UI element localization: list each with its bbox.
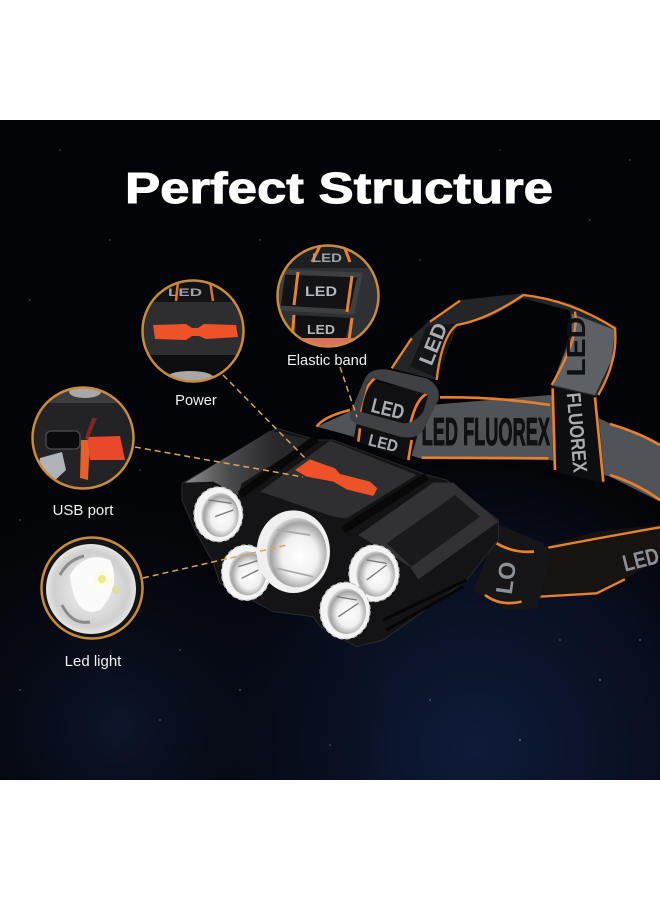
front buckle and band: LED (369, 394, 407, 425)
center top panel (260, 441, 417, 518)
callout: elastic band (278, 240, 378, 348)
left top panel (185, 431, 312, 495)
arrow: USB port leader (135, 447, 303, 477)
housing (182, 428, 498, 647)
callout: LED light (42, 538, 142, 638)
upper arc strap: LED (415, 320, 453, 369)
title: Perfect Structure (125, 164, 553, 213)
arrow: elastic band leader (340, 367, 357, 417)
lens: bottom (320, 582, 370, 639)
lens: lower left (222, 545, 270, 600)
callout: power: LED (168, 287, 202, 299)
background: night sky (0, 120, 660, 780)
front buckle and band (350, 369, 439, 462)
vents (383, 580, 467, 630)
arrow: power leader (223, 375, 307, 460)
callout: power (140, 280, 250, 385)
side lower strap: LO (491, 560, 521, 596)
callout: elastic band: LED (305, 283, 337, 299)
upper arc strap: LED (561, 317, 591, 377)
upper arc strap (392, 293, 617, 397)
side lower strap (473, 525, 660, 610)
callout: USB port (30, 385, 140, 488)
right top panel (358, 483, 498, 579)
leader lines (135, 367, 357, 578)
front buckle and band: LED (366, 430, 400, 456)
rear slider wrap (552, 387, 605, 483)
arrow: LED light leader (143, 545, 287, 578)
label: power: Power (175, 393, 217, 409)
rear slider wrap: FLUOREX (562, 392, 591, 474)
label: elastic band: Elastic band (287, 353, 367, 369)
lens: large center (257, 510, 330, 593)
lens: right (349, 545, 399, 602)
callout: elastic band: LED (307, 322, 335, 337)
lens: upper left (194, 487, 243, 542)
headband strap (317, 293, 660, 610)
callout: elastic band: LED (312, 251, 342, 265)
power button (295, 459, 377, 496)
headlamp body (182, 428, 498, 647)
grooves (240, 438, 427, 530)
label: LED light: Led light (65, 653, 122, 670)
back grey band (317, 395, 660, 502)
label: USB port: USB port (53, 502, 114, 519)
